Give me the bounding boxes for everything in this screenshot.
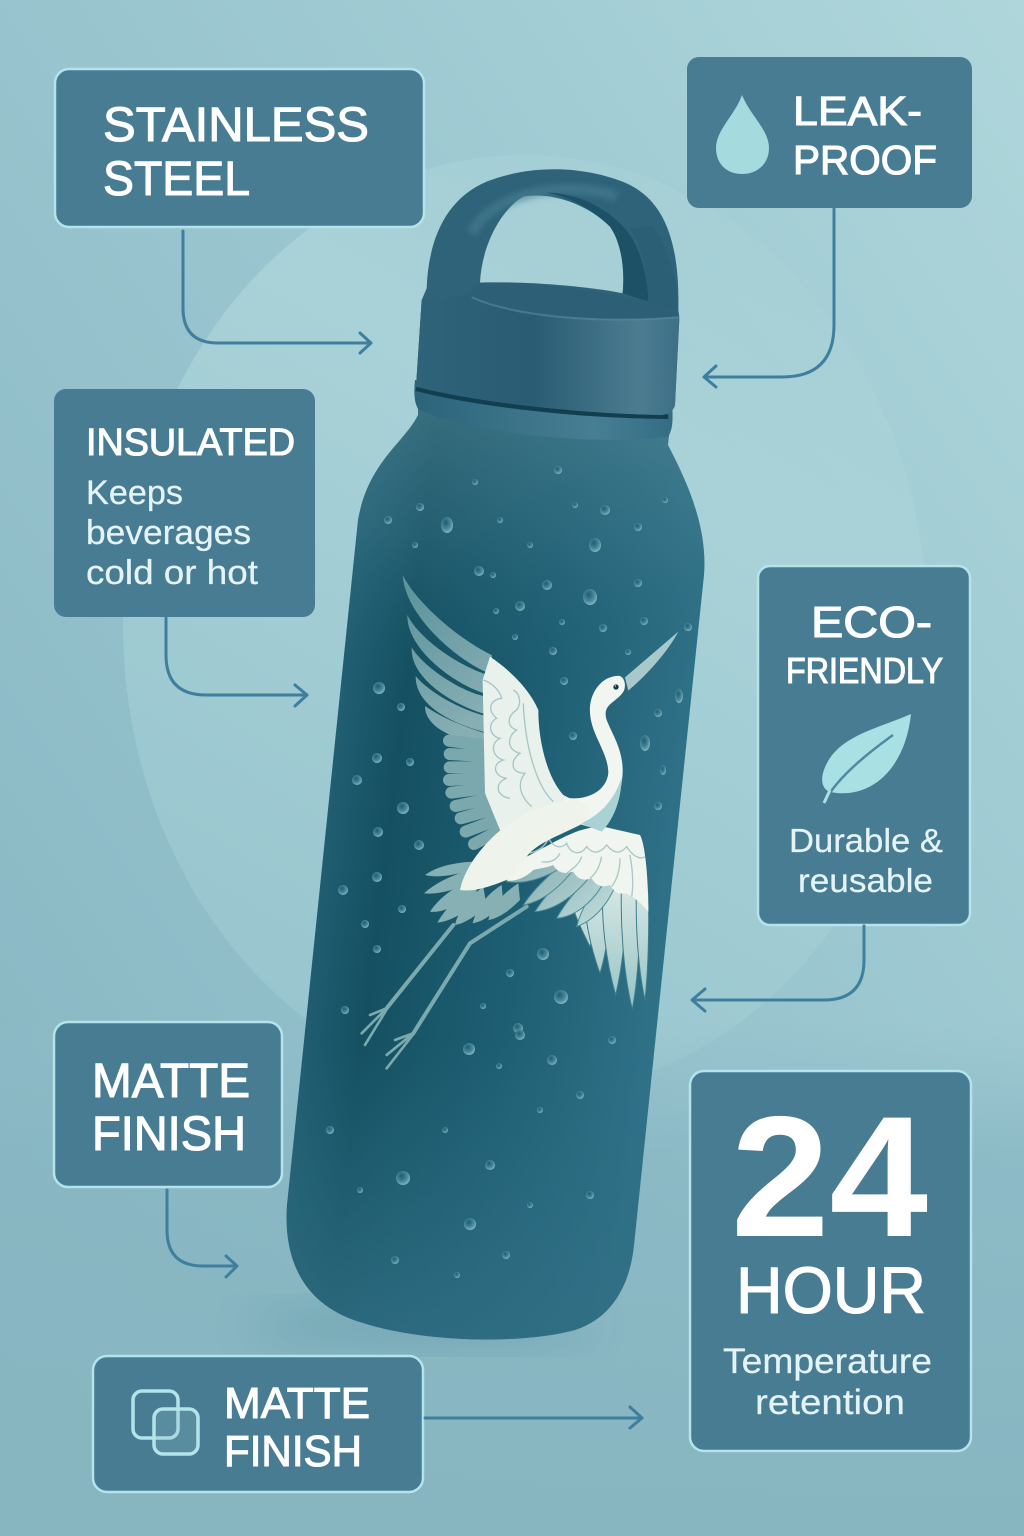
text: durable and reusable	[789, 822, 943, 899]
text: temperature retention: retention	[755, 1383, 905, 1422]
body	[460, 800, 589, 891]
lower wing mid feathers	[507, 853, 617, 927]
lower wing coverts	[507, 827, 648, 912]
text: keeps beverages cold or hot: Keeps	[86, 474, 183, 512]
callout: leak-proof	[687, 57, 972, 208]
heading: matte finish: MATTE	[92, 1055, 250, 1108]
heading: leak-proof: PROOF	[793, 137, 937, 183]
heading: stainless steel	[103, 99, 369, 206]
heading: insulated: INSULATED	[86, 422, 295, 464]
heading: hour: HOUR	[736, 1253, 926, 1327]
icon: water drop	[716, 95, 769, 174]
text: keeps beverages cold or hot: beverages	[86, 514, 251, 552]
heading: stainless steel: STAINLESS	[103, 99, 369, 152]
cap assembly	[414, 169, 679, 440]
neck ring	[414, 380, 673, 440]
water droplets	[326, 466, 692, 1278]
heading: leak-proof: LEAK-	[793, 88, 922, 134]
arrow: matte finish to 24 hour	[425, 1407, 642, 1428]
heading: eco-friendly: ECO-	[811, 598, 932, 647]
cap top surface	[470, 282, 679, 319]
background circle	[123, 155, 927, 1095]
cap front	[416, 295, 679, 415]
handle outer right	[630, 227, 678, 310]
bottle body	[287, 405, 704, 1339]
heading: matte finish: FINISH	[224, 1427, 362, 1476]
neck and head	[563, 632, 678, 832]
icon: overlapping squares	[133, 1391, 198, 1454]
callout: matte finish left	[54, 1022, 282, 1187]
bottle shadow	[250, 1305, 590, 1345]
heading: matte finish	[92, 1055, 250, 1161]
floor	[0, 1020, 1024, 1536]
heading: matte finish	[224, 1379, 370, 1476]
text: temperature retention: Temperature	[723, 1342, 932, 1381]
callout: stainless steel	[55, 69, 424, 227]
handle highlight	[472, 189, 617, 233]
cap gap shadow	[416, 389, 668, 417]
lower wing long feathers	[567, 873, 649, 1009]
handle inner shadow	[547, 193, 648, 302]
tail feathers	[424, 862, 520, 925]
icon: leaf	[822, 714, 911, 803]
arrow: matte finish to bottle base	[167, 1190, 237, 1277]
heading: eco-friendly	[786, 598, 943, 691]
arrow: eco-friendly to bottle	[692, 926, 864, 1011]
heading: eco-friendly: FRIENDLY	[786, 650, 943, 691]
arrow: stainless steel to cap	[183, 231, 371, 353]
text: temperature retention	[723, 1342, 932, 1422]
legs	[362, 907, 527, 1068]
bottle	[287, 169, 704, 1339]
text: keeps beverages cold or hot: cold or hot	[86, 554, 259, 592]
heading: leak-proof	[793, 88, 937, 183]
heading: matte finish: FINISH	[92, 1108, 246, 1161]
upper wing primary feathers	[403, 575, 493, 745]
crane illustration	[362, 575, 678, 1068]
callout: eco-friendly	[758, 566, 970, 925]
callout: insulated	[54, 389, 315, 617]
arrow: insulated to bottle	[166, 618, 307, 706]
text: durable and reusable: reusable	[798, 862, 933, 899]
arrow: leak-proof to cap	[704, 209, 834, 387]
upper wing coverts	[483, 657, 572, 830]
heading: stainless steel: STEEL	[103, 153, 250, 206]
text: keeps beverages cold or hot	[86, 474, 259, 592]
callout: matte finish bottom	[93, 1356, 423, 1492]
callout: 24 hour	[690, 1071, 971, 1451]
cap rim highlight	[472, 297, 679, 320]
text: durable and reusable: Durable &	[789, 822, 943, 859]
cap handle and lid	[416, 169, 679, 415]
heading: matte finish: MATTE	[224, 1379, 370, 1428]
stat: 24: 24	[731, 1081, 928, 1273]
